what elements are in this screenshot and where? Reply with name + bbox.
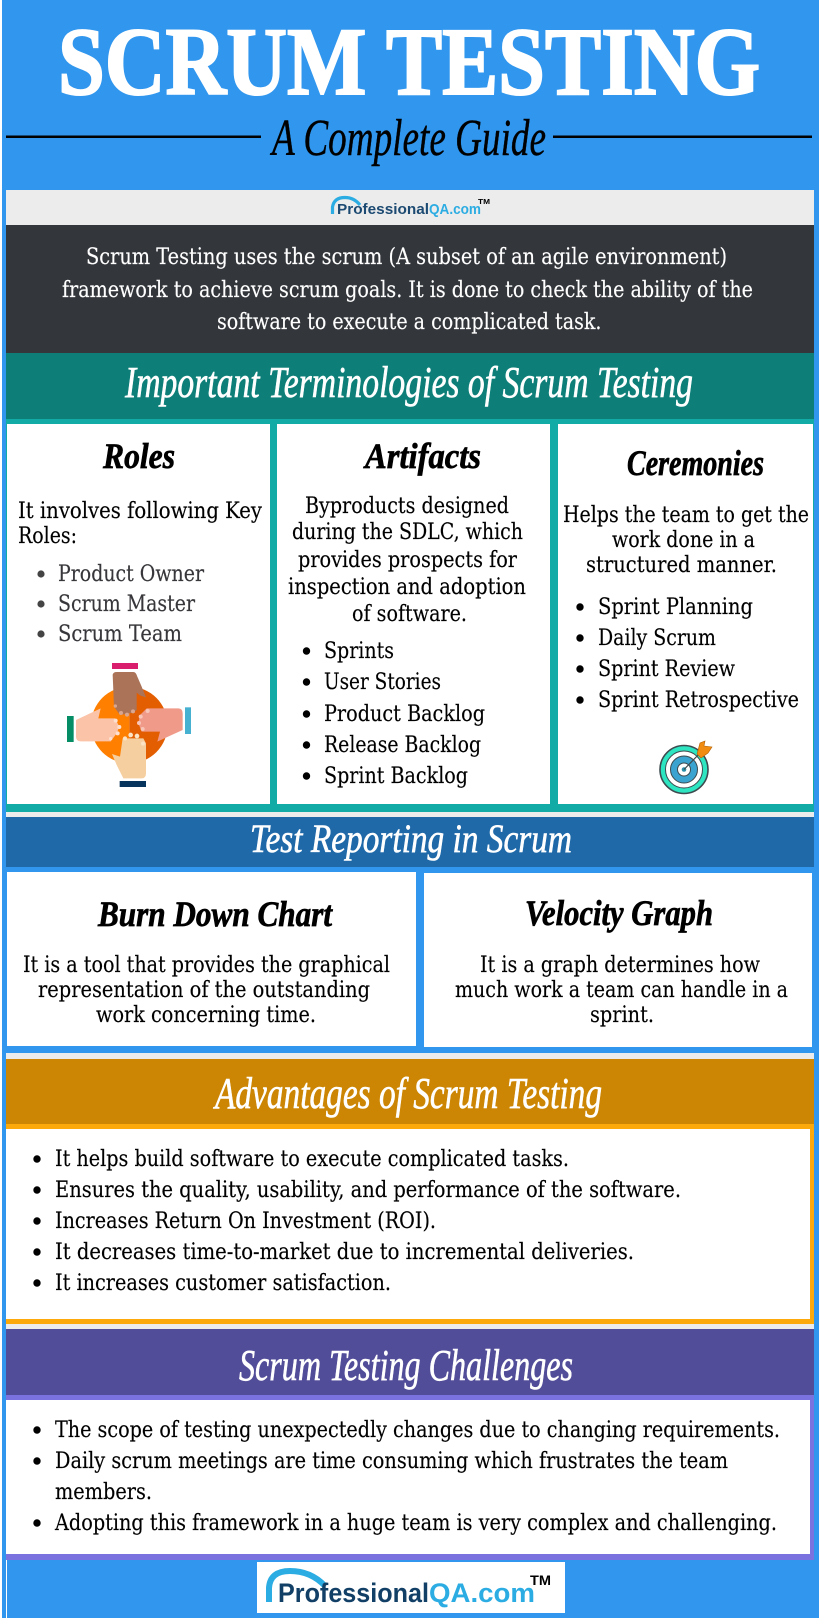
list: artifacts	[303, 639, 485, 789]
text: Artifacts description: inspection and adoption	[288, 575, 526, 600]
panel: Advantages list: It increases customer satisfaction.	[55, 1271, 391, 1296]
list: artifacts: Sprint Backlog	[324, 764, 468, 789]
text: Velocity Graph description: sprint.	[590, 1003, 654, 1028]
list: ceremonies: Sprint Review	[598, 657, 735, 682]
panel: Advantages list: Increases Return On Investment (ROI).	[55, 1209, 436, 1234]
list: roles	[37, 562, 204, 647]
text: Artifacts description: Byproducts designed	[305, 494, 509, 519]
panel: Advantages list: It helps build software to execute complicated tasks.	[55, 1147, 569, 1172]
heading: Advantages: Advantages of Scrum Testing	[213, 1069, 602, 1118]
logo arc	[269, 1571, 325, 1602]
panel: Challenges list: Daily scrum meetings are time consuming which frustrates the team	[55, 1449, 728, 1474]
list: roles: Scrum Master	[58, 592, 195, 617]
panel: Velocity Graph	[424, 873, 812, 1047]
panel: Challenges list	[6, 1395, 814, 1560]
text: Burn Down Chart description	[23, 953, 390, 1028]
panel: Advantages list: Ensures the quality, usability, and performance of the software.	[55, 1178, 681, 1203]
list: ceremonies: Daily Scrum	[598, 626, 716, 651]
icon: target with arrow	[660, 741, 712, 794]
logo domain: QA.com	[429, 201, 481, 218]
panel: Artifacts	[277, 424, 550, 804]
heading: Test Reporting: Test Reporting in Scrum	[250, 816, 572, 861]
text: Ceremonies description	[563, 503, 809, 578]
panel: Advantages list	[6, 1124, 814, 1324]
heading: Advantages	[6, 1059, 814, 1124]
text: Artifacts description: during the SDLC, which	[292, 520, 523, 545]
gap band	[6, 812, 814, 817]
panel: Roles	[7, 424, 270, 804]
text: Artifacts description: provides prospects for	[298, 548, 517, 573]
panel frame: terminologies	[6, 419, 814, 812]
text: Velocity Graph description	[455, 953, 788, 1028]
list: roles: Scrum Team	[58, 622, 182, 647]
heading: Artifacts: Artifacts	[363, 436, 481, 476]
panel: Ceremonies	[558, 424, 813, 804]
gap band	[6, 1053, 814, 1059]
text: Artifacts description	[288, 494, 526, 627]
panel: introduction	[6, 225, 814, 353]
list: roles: Product Owner	[58, 562, 204, 587]
subtitle with rules: A Complete Guide	[270, 110, 546, 167]
gap band	[6, 1324, 814, 1329]
text: Velocity Graph description: It is a graph determines how	[480, 953, 760, 978]
footer logo	[257, 1562, 565, 1613]
list: ceremonies	[576, 595, 799, 713]
panel: Burn Down Chart	[7, 872, 416, 1046]
text: Roles description: Roles:	[18, 524, 77, 549]
logo trademark: TM	[530, 1572, 551, 1588]
heading: Ceremonies: Ceremonies	[627, 443, 764, 483]
text: Ceremonies description: work done in a	[612, 528, 755, 553]
panel: introduction: software to execute a complicated task.	[217, 310, 602, 335]
logo trademark: TM	[478, 197, 490, 206]
heading: Important Terminologies	[6, 353, 814, 419]
logo domain: QA.com	[429, 1578, 535, 1608]
text: Roles description: It involves following Key	[18, 499, 263, 524]
list: artifacts: Sprints	[324, 639, 394, 664]
text: Burn Down Chart description: work concerning time.	[96, 1003, 316, 1028]
list: ceremonies: Sprint Planning	[598, 595, 753, 620]
panel: Challenges list: members.	[55, 1480, 152, 1505]
panel: Advantages list: It decreases time-to-market due to incremental deliveries.	[55, 1240, 634, 1265]
logo wordmark: Professional	[337, 201, 429, 218]
list: artifacts: Release Backlog	[324, 733, 481, 758]
heading: Burn Down Chart: Burn Down Chart	[97, 894, 333, 934]
icon: four hands	[67, 663, 191, 787]
panel: top logo band	[6, 190, 814, 225]
heading: Velocity Graph: Velocity Graph	[525, 893, 713, 933]
text: Burn Down Chart description: representation of the outstanding	[38, 978, 370, 1003]
panel: introduction: Scrum Testing uses the scrum (A subset of an agile environment)	[86, 245, 727, 270]
logo wordmark: Professional	[278, 1578, 429, 1608]
list: artifacts: User Stories	[324, 670, 441, 695]
text: Roles description	[18, 499, 263, 549]
text: Burn Down Chart description: It is a tool that provides the graphical	[23, 953, 390, 978]
heading: Test Reporting	[6, 816, 814, 867]
logo arc	[332, 198, 360, 214]
heading: Challenges	[6, 1329, 814, 1395]
heading: Roles: Roles	[102, 436, 175, 476]
text: Ceremonies description: structured manner.	[586, 553, 777, 578]
list: artifacts: Product Backlog	[324, 702, 485, 727]
text: Artifacts description: of software.	[352, 602, 467, 627]
heading: Challenges: Scrum Testing Challenges	[239, 1341, 573, 1390]
